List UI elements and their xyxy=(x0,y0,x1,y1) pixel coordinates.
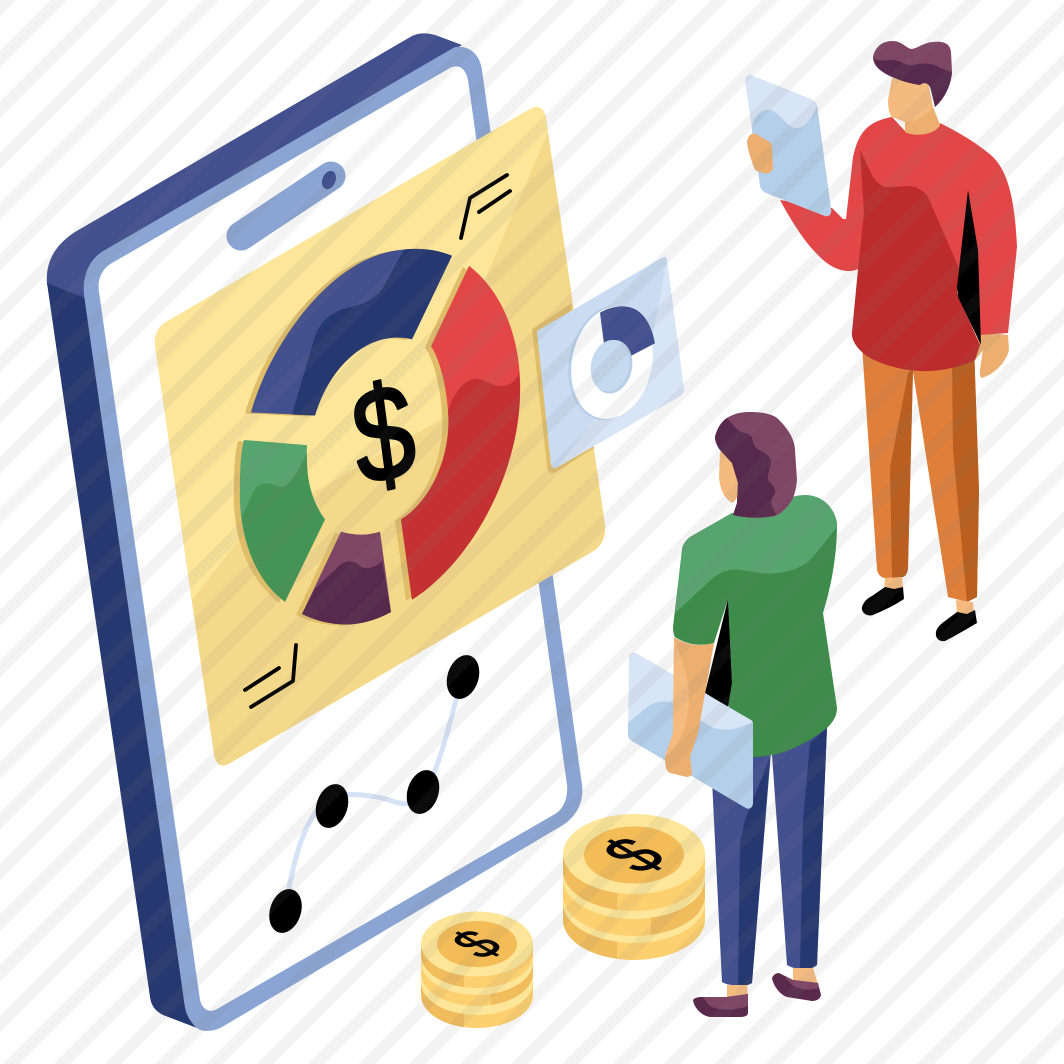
phone xyxy=(47,33,582,1031)
sweater fold xyxy=(957,190,981,345)
pie segment purple xyxy=(302,532,391,624)
left trouser leg xyxy=(712,740,772,986)
camera dot xyxy=(319,169,339,191)
card rim xyxy=(532,304,594,473)
tablet xyxy=(745,75,831,216)
top coin side xyxy=(563,854,705,911)
mini donut card xyxy=(532,257,684,473)
chart points xyxy=(264,651,485,937)
pants shadow xyxy=(890,345,979,602)
shirt highlight xyxy=(675,495,837,613)
yellow card xyxy=(155,107,605,766)
face xyxy=(719,450,739,503)
pants xyxy=(862,345,979,602)
sweater xyxy=(780,117,1017,335)
top coin face xyxy=(421,912,533,976)
arm xyxy=(665,637,714,777)
pie rim xyxy=(234,250,514,625)
shoes xyxy=(693,973,821,1017)
middle coin xyxy=(421,962,533,1006)
person standing with tablet xyxy=(745,41,1017,641)
middle coin xyxy=(563,879,705,936)
phone body xyxy=(47,33,462,300)
donut hole xyxy=(587,336,637,397)
hair xyxy=(715,412,797,518)
phone screen xyxy=(99,66,567,1011)
tablet xyxy=(628,652,753,809)
card base xyxy=(537,257,684,468)
card light area xyxy=(155,107,548,600)
coin centre xyxy=(584,826,684,884)
card shade xyxy=(537,257,667,468)
shirt xyxy=(673,495,837,757)
pie segment red xyxy=(401,266,520,600)
coin stack small xyxy=(421,912,533,1028)
hair xyxy=(873,41,952,107)
donut ring xyxy=(558,297,662,428)
left trouser shadow xyxy=(738,757,770,987)
bottom coin xyxy=(563,903,705,960)
hand right xyxy=(975,332,1009,378)
neck and face xyxy=(888,78,940,135)
card base xyxy=(155,107,605,766)
phone frame xyxy=(84,47,582,1031)
right trouser shadow xyxy=(800,728,827,970)
pie segment navy xyxy=(251,249,452,416)
right trouser leg xyxy=(772,728,827,969)
top coin face xyxy=(563,814,705,894)
hand on tablet xyxy=(747,133,773,173)
donut segment xyxy=(600,306,655,358)
ankles xyxy=(727,968,818,998)
bottom coin xyxy=(421,973,533,1028)
sweater shadow xyxy=(852,150,980,371)
speaker pill xyxy=(241,176,331,236)
chart line xyxy=(285,677,463,911)
coin centre xyxy=(437,921,517,967)
upper band xyxy=(421,955,533,995)
corner mark bottom xyxy=(245,645,296,707)
upper band xyxy=(563,871,705,919)
lower band xyxy=(563,896,705,943)
phone side xyxy=(47,283,197,1028)
corner mark top xyxy=(461,175,510,238)
coin dollar: $ xyxy=(585,827,682,883)
line chart xyxy=(264,651,485,937)
lower band xyxy=(421,973,533,1015)
shirt fold xyxy=(705,599,732,707)
ankles xyxy=(884,577,974,615)
top coin side xyxy=(421,944,533,988)
shoes xyxy=(862,587,977,641)
coin stack large xyxy=(563,814,705,960)
person from behind with tablet xyxy=(628,412,837,1017)
pie segment green xyxy=(240,440,325,602)
coin dollar: $ xyxy=(439,922,517,967)
dollar sign: $ xyxy=(344,353,423,515)
